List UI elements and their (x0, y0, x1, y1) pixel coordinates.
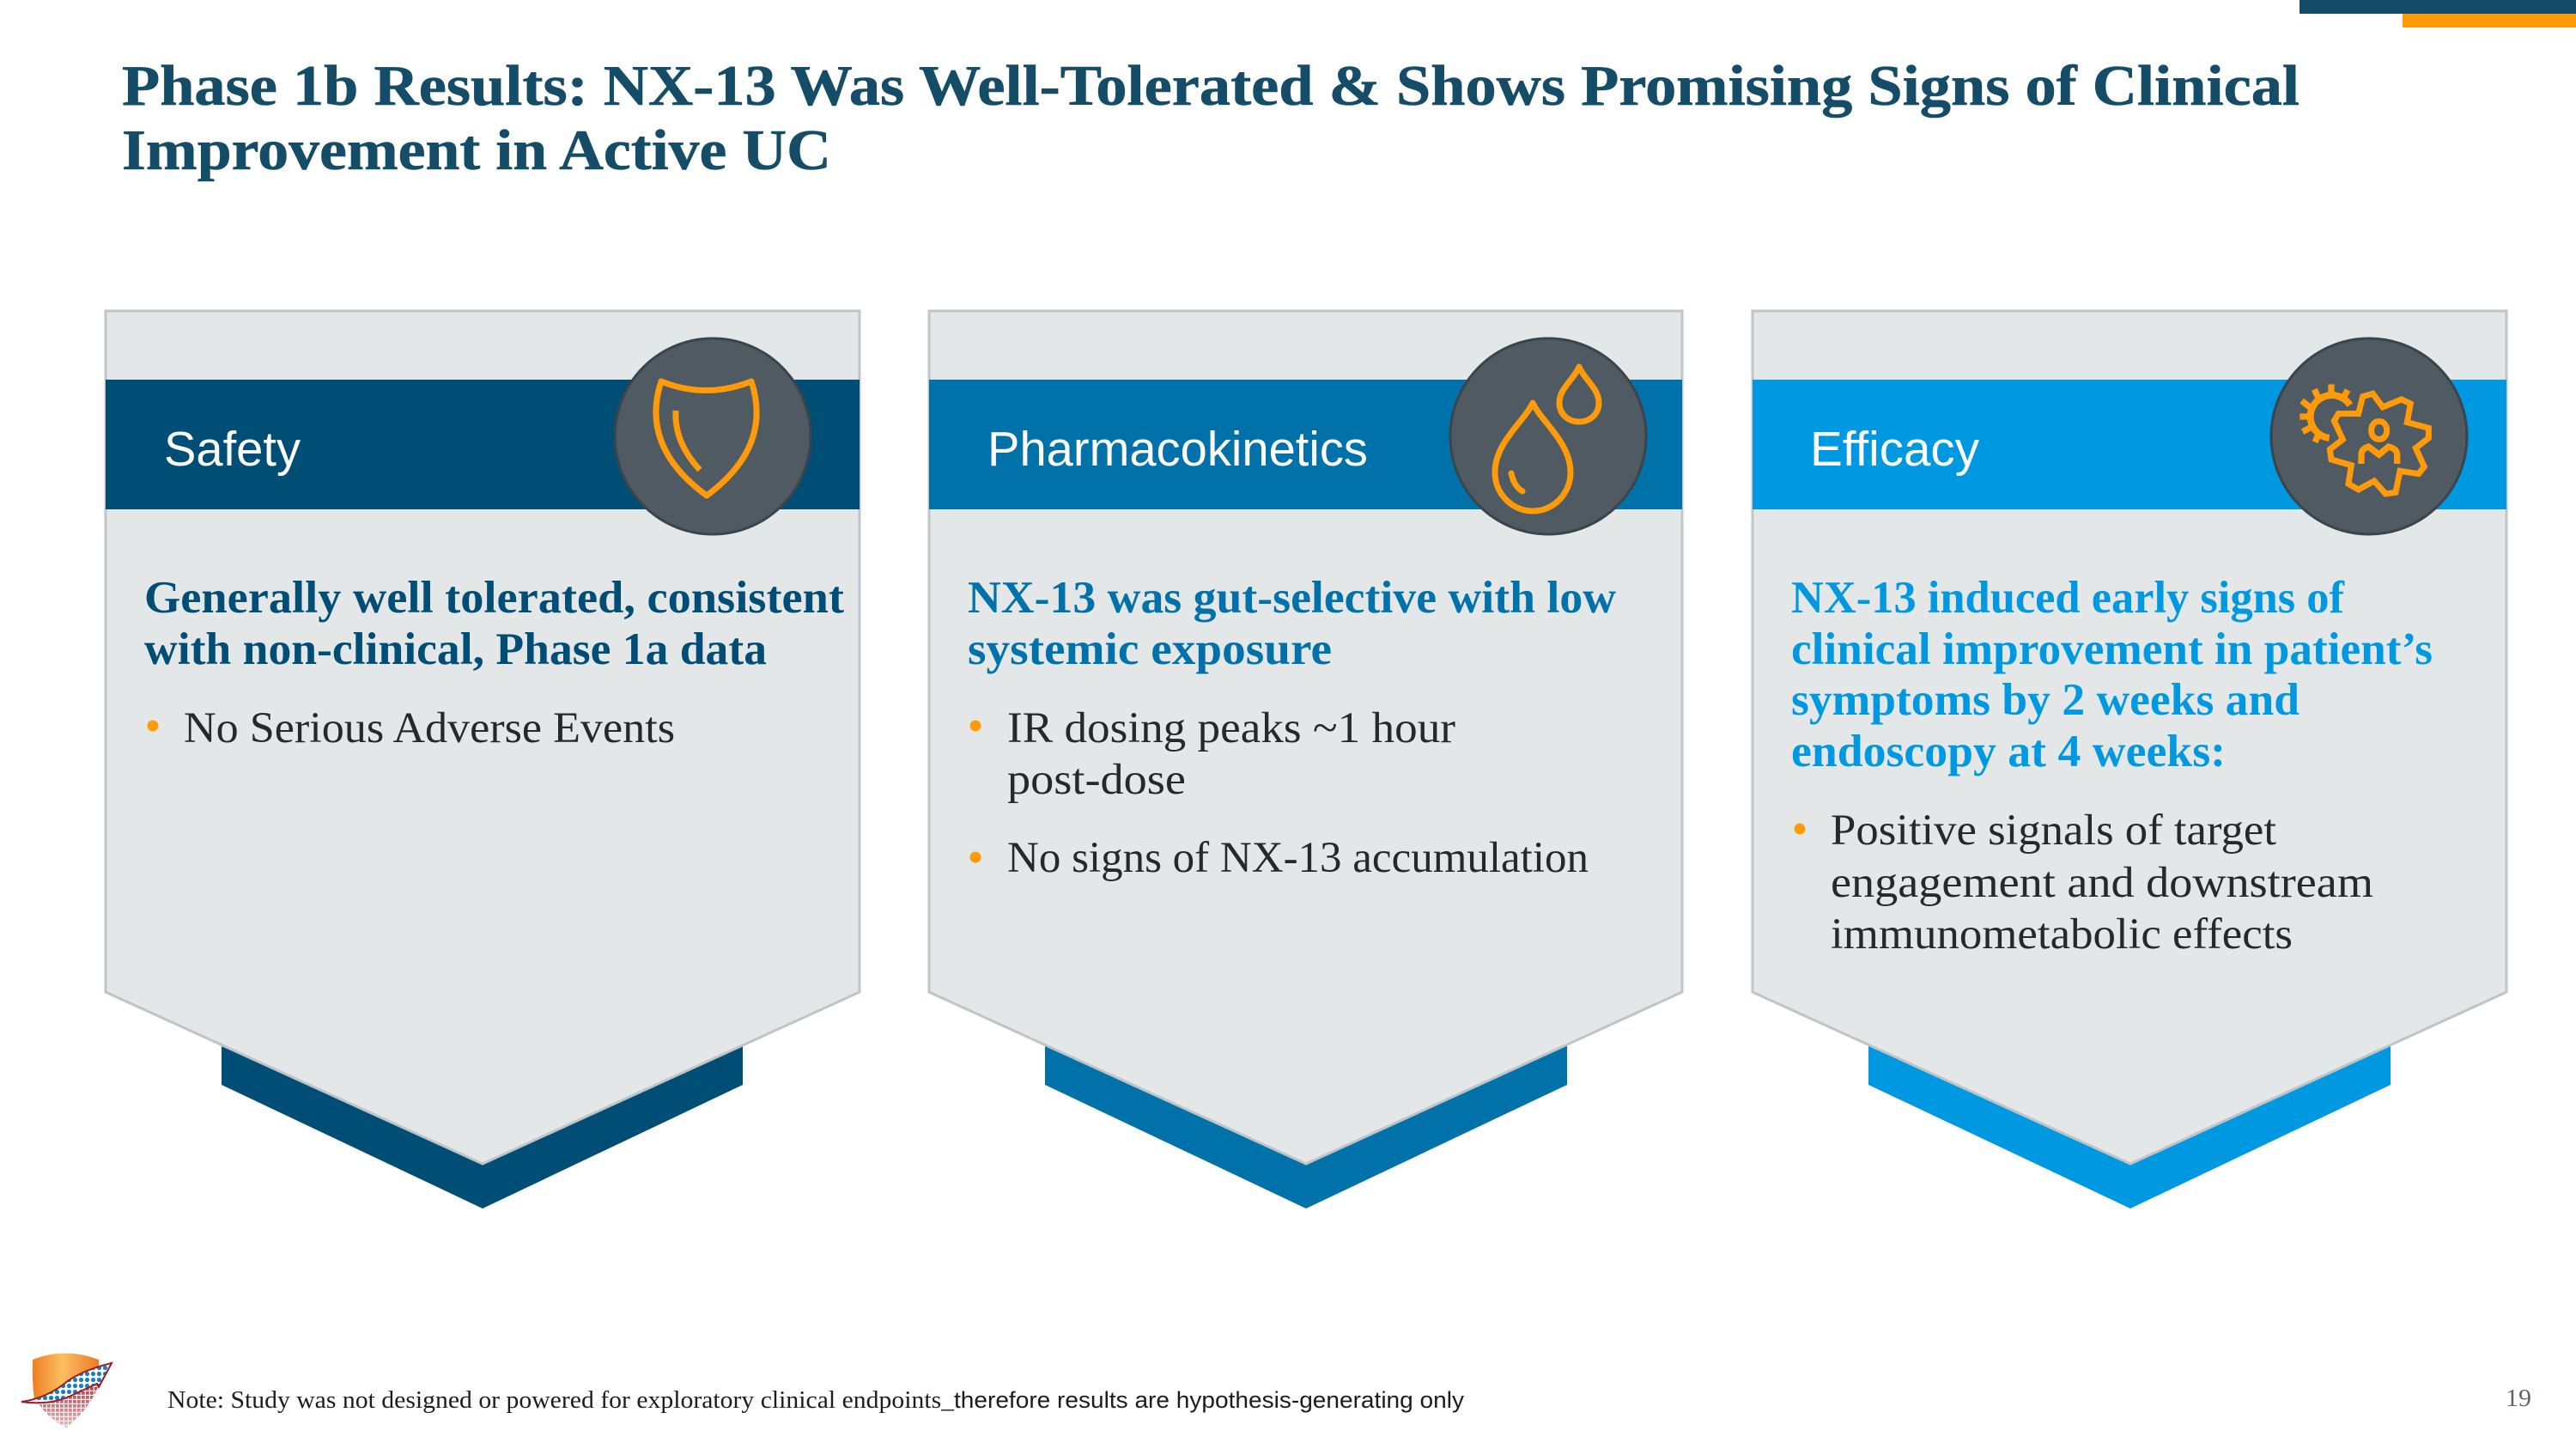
panel heading: Safety (164, 422, 301, 477)
summary text: systemic exposure (968, 624, 1332, 674)
icon: company logo (21, 1354, 112, 1428)
summary text (1791, 573, 2433, 776)
icon: water drops (1450, 338, 1646, 534)
summary text: endoscopy at 4 weeks: (1791, 727, 2226, 776)
bullet list (1795, 807, 2373, 959)
chevron shadow (1045, 1031, 1567, 1209)
panel background (929, 311, 1682, 1164)
bullet list: No signs of NX-13 accumulation (1007, 834, 1589, 882)
summary text: clinical improvement in patient’s (1791, 624, 2433, 674)
chevron shadow (1868, 1031, 2391, 1209)
title (122, 54, 2300, 182)
page number: 19 (2506, 1385, 2531, 1412)
panel: safety (106, 311, 860, 1209)
summary text: Generally well tolerated, consistent (144, 573, 844, 623)
bullet list: post-dose (1007, 756, 1186, 804)
panel: pharmacokinetics (929, 311, 1682, 1209)
title: Improvement in Active UC (122, 119, 831, 182)
bullet list: Positive signals of target (1831, 807, 2276, 855)
footnote: Note: Study was not designed or powered for exploratory clinical endpoints_ (167, 1387, 955, 1414)
panel background (1753, 311, 2506, 1164)
footnote: therefore results are hypothesis-generating only (954, 1387, 1465, 1413)
bullet list: engagement and downstream (1831, 859, 2373, 907)
footnote (167, 1387, 1465, 1414)
summary text (144, 573, 844, 674)
top corner accent bars (2300, 0, 2576, 27)
panel: efficacy (1753, 311, 2506, 1209)
chevron shadow (222, 1031, 743, 1209)
summary text: NX-13 was gut-selective with low (968, 573, 1616, 623)
panel background (106, 311, 860, 1164)
bullet list: immunometabolic effects (1831, 910, 2293, 959)
icon: gears with person (2271, 338, 2467, 534)
header band (1753, 380, 2506, 509)
bullet list: IR dosing peaks ~1 hour (1007, 704, 1455, 752)
bullet list (970, 704, 1589, 882)
panel heading: Efficacy (1810, 422, 1979, 477)
bullet list: No Serious Adverse Events (184, 704, 675, 752)
summary text: with non-clinical, Phase 1a data (144, 624, 767, 674)
title: Phase 1b Results: NX-13 Was Well-Tolerated & Shows Promising Signs of Clinical (122, 54, 2300, 118)
icon: shield (615, 338, 811, 534)
summary text (968, 573, 1616, 674)
summary text: symptoms by 2 weeks and (1791, 675, 2300, 725)
summary text: NX-13 induced early signs of (1791, 573, 2345, 623)
header band (106, 380, 860, 509)
header band (929, 380, 1682, 509)
panel heading: Pharmacokinetics (987, 422, 1368, 477)
